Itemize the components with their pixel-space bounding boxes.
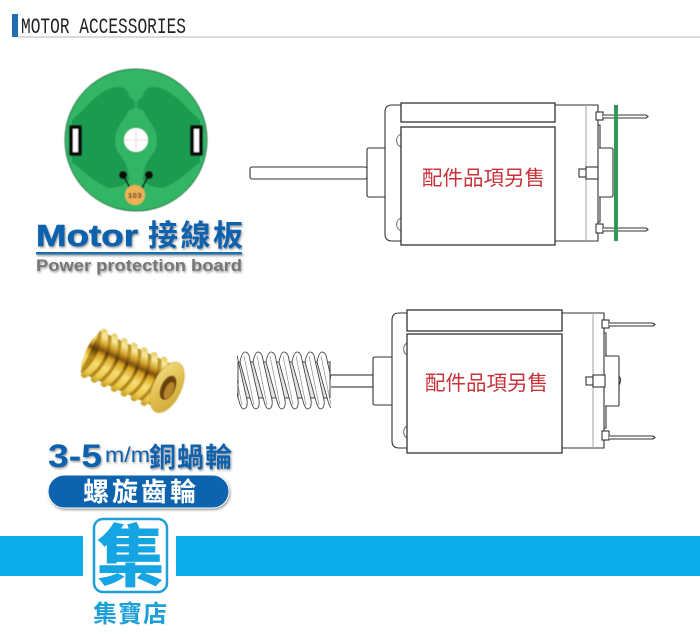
main plate (401, 127, 555, 245)
diagram: motor with worm gear (228, 310, 655, 453)
gear title (48, 438, 232, 474)
Chinese label: 銅蝸輪 (149, 443, 232, 473)
motor rear housing (385, 105, 598, 241)
note: sold separately: 配件品項另售 (422, 167, 545, 190)
icon: brass worm gear (75, 325, 191, 418)
green board edge (614, 105, 618, 241)
Chinese label: 接線板 (148, 220, 243, 253)
motor shaft (250, 167, 367, 179)
unit label: m/m (105, 444, 150, 467)
worm gear (237, 352, 331, 410)
rear cap details (579, 105, 613, 241)
size label: 3-5 (48, 438, 102, 474)
top plate (407, 310, 562, 331)
header accent bar (12, 14, 18, 37)
footer band right (176, 536, 700, 576)
icon: green protection board (65, 69, 207, 211)
top plate (401, 103, 555, 122)
board title (36, 218, 243, 275)
terminal pins (603, 115, 648, 231)
title rule (36, 252, 242, 254)
capacitor 103 (125, 185, 145, 205)
mounting holes (404, 343, 407, 438)
diagram: motor with board (250, 103, 648, 245)
header title: MOTOR ACCESSORIES (21, 15, 186, 40)
store name: 集寶店 (93, 601, 167, 628)
header (12, 14, 700, 40)
Motor label: Motor (36, 218, 138, 253)
capacitor 103: 103 (128, 191, 142, 200)
motor rear housing (392, 313, 604, 448)
gear name pill: 螺旋齒輪 (83, 477, 196, 507)
capacitor leads (120, 172, 152, 188)
motor boss (373, 357, 392, 405)
mounting holes (397, 134, 401, 231)
rear cap details (586, 313, 620, 448)
left terminal slot (69, 125, 82, 156)
main plate (407, 334, 562, 453)
motor boss (367, 148, 385, 197)
terminal pins (609, 323, 655, 439)
motor shaft (330, 375, 373, 387)
header rule (18, 36, 700, 38)
English subtitle: Power protection board (36, 257, 242, 275)
logo: 集 (96, 520, 165, 596)
right terminal slot (190, 125, 203, 156)
board center hole (124, 128, 148, 152)
footer band left (0, 536, 83, 576)
note: sold separately: 配件品項另售 (425, 372, 548, 395)
gear name pill (48, 475, 229, 508)
